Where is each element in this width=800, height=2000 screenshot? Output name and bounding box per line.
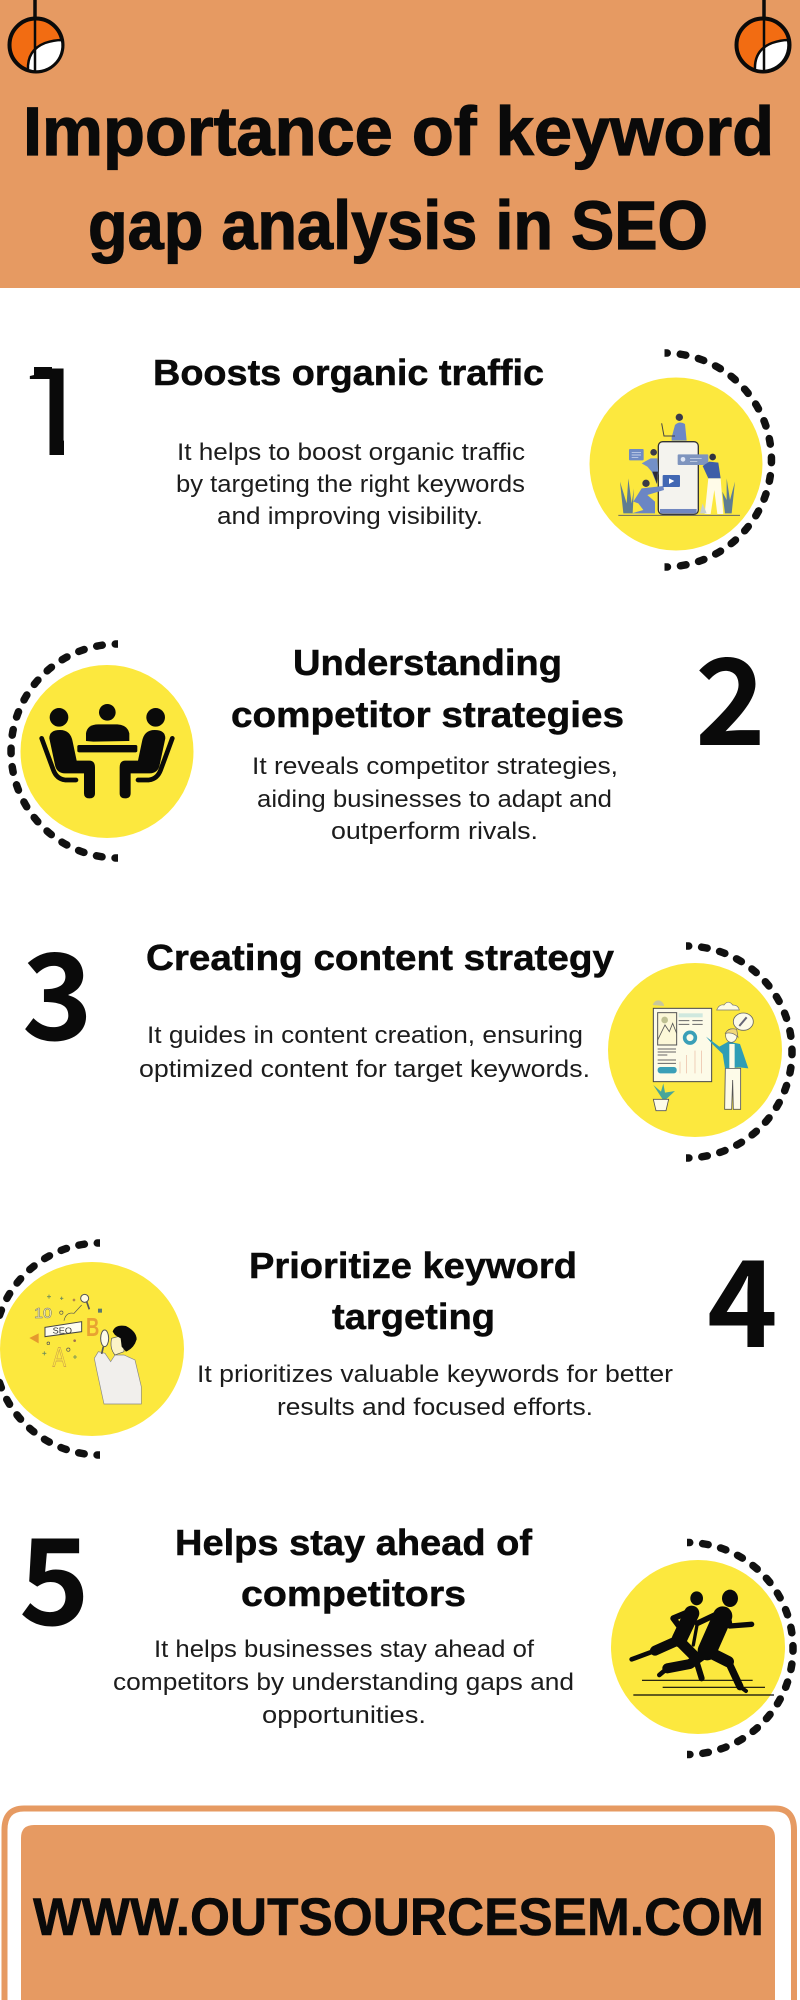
number 4: 4 [707, 1208, 778, 1382]
panel: item 4 prioritize keyword targeting [0, 1239, 774, 1459]
icon: person inspecting SEO with magnifier in yellow circle: A [53, 1342, 66, 1373]
heading: item 1: Boosts organic traffic [153, 352, 544, 393]
heading: item 2 [231, 642, 624, 735]
panel: header banner [0, 0, 800, 288]
heading: item 2: Understanding [293, 642, 562, 683]
title: gap analysis in SEO [88, 187, 708, 264]
title [23, 93, 774, 264]
icon: person inspecting SEO with magnifier in yellow circle [0, 1243, 184, 1455]
number 1: 1 [17, 316, 88, 490]
text block: item 1: by targeting the right keywords [176, 471, 525, 498]
icon: person inspecting SEO with magnifier in yellow circle: SEO [53, 1327, 72, 1336]
heading: item 4: Prioritize keyword [249, 1245, 577, 1286]
number 5: 5 [19, 1486, 90, 1660]
text block: item 3 [139, 1022, 590, 1083]
panel: item 5 helps stay ahead of competitors [22, 1528, 797, 1758]
heading: item 5: Helps stay ahead of [175, 1522, 533, 1563]
icon: people around a phone in yellow circle [590, 353, 771, 567]
text block: item 4: It prioritizes valuable keywords for better [197, 1361, 673, 1388]
text block: item 1: and improving visibility. [217, 503, 483, 530]
text block: item 1: It helps to boost organic traffic [177, 439, 525, 466]
text block: item 5 [113, 1636, 574, 1729]
icon: person inspecting SEO with magnifier in yellow circle: 10 [34, 1306, 52, 1322]
icon: person inspecting SEO with magnifier in yellow circle: B [86, 1312, 99, 1342]
text block: item 4: results and focused efforts. [277, 1394, 593, 1421]
panel: website footer [4, 1808, 794, 2000]
text block: item 5: competitors by understanding gaps and [113, 1669, 574, 1696]
heading: item 2: competitor strategies [231, 694, 624, 735]
footer box [21, 1825, 775, 2000]
outer frame [4, 1808, 794, 2000]
heading: item 5 [175, 1522, 533, 1614]
heading: item 3: Creating content strategy [146, 937, 614, 978]
panel: item 3 creating content strategy [25, 942, 796, 1162]
number 3: 3 [22, 901, 93, 1075]
text block: item 2: outperform rivals. [331, 818, 538, 845]
icon: two runners in yellow circle [611, 1542, 793, 1754]
text block: item 3: It guides in content creation, ensuring [147, 1022, 583, 1049]
text block: item 5: It helps businesses stay ahead of [154, 1636, 534, 1663]
text block: item 1 [176, 439, 525, 530]
panel: item 2 understanding competitor strategies [7, 640, 760, 862]
panel: item 1 boosts organic traffic [30, 349, 776, 571]
title: Importance of keyword [23, 93, 774, 170]
text block: item 2: It reveals competitor strategies, [252, 753, 618, 780]
website url: WWW.OUTSOURCESEM.COM [33, 1888, 764, 1947]
text block: item 4 [197, 1361, 673, 1421]
heading: item 4: targeting [332, 1296, 495, 1337]
icon: meeting table in yellow circle [11, 644, 193, 858]
text block: item 3: optimized content for target keywords. [139, 1056, 590, 1083]
text block: item 2: aiding businesses to adapt and [257, 786, 612, 813]
heading: item 5: competitors [241, 1573, 466, 1614]
icon: person presenting a report in yellow circle [608, 946, 792, 1158]
number 2: 2 [695, 606, 766, 780]
text block: item 2 [252, 753, 618, 845]
icon: right hanging lantern [736, 0, 790, 72]
heading: item 4 [249, 1245, 577, 1337]
icon: left hanging lantern [10, 0, 63, 72]
text block: item 5: opportunities. [262, 1702, 426, 1729]
